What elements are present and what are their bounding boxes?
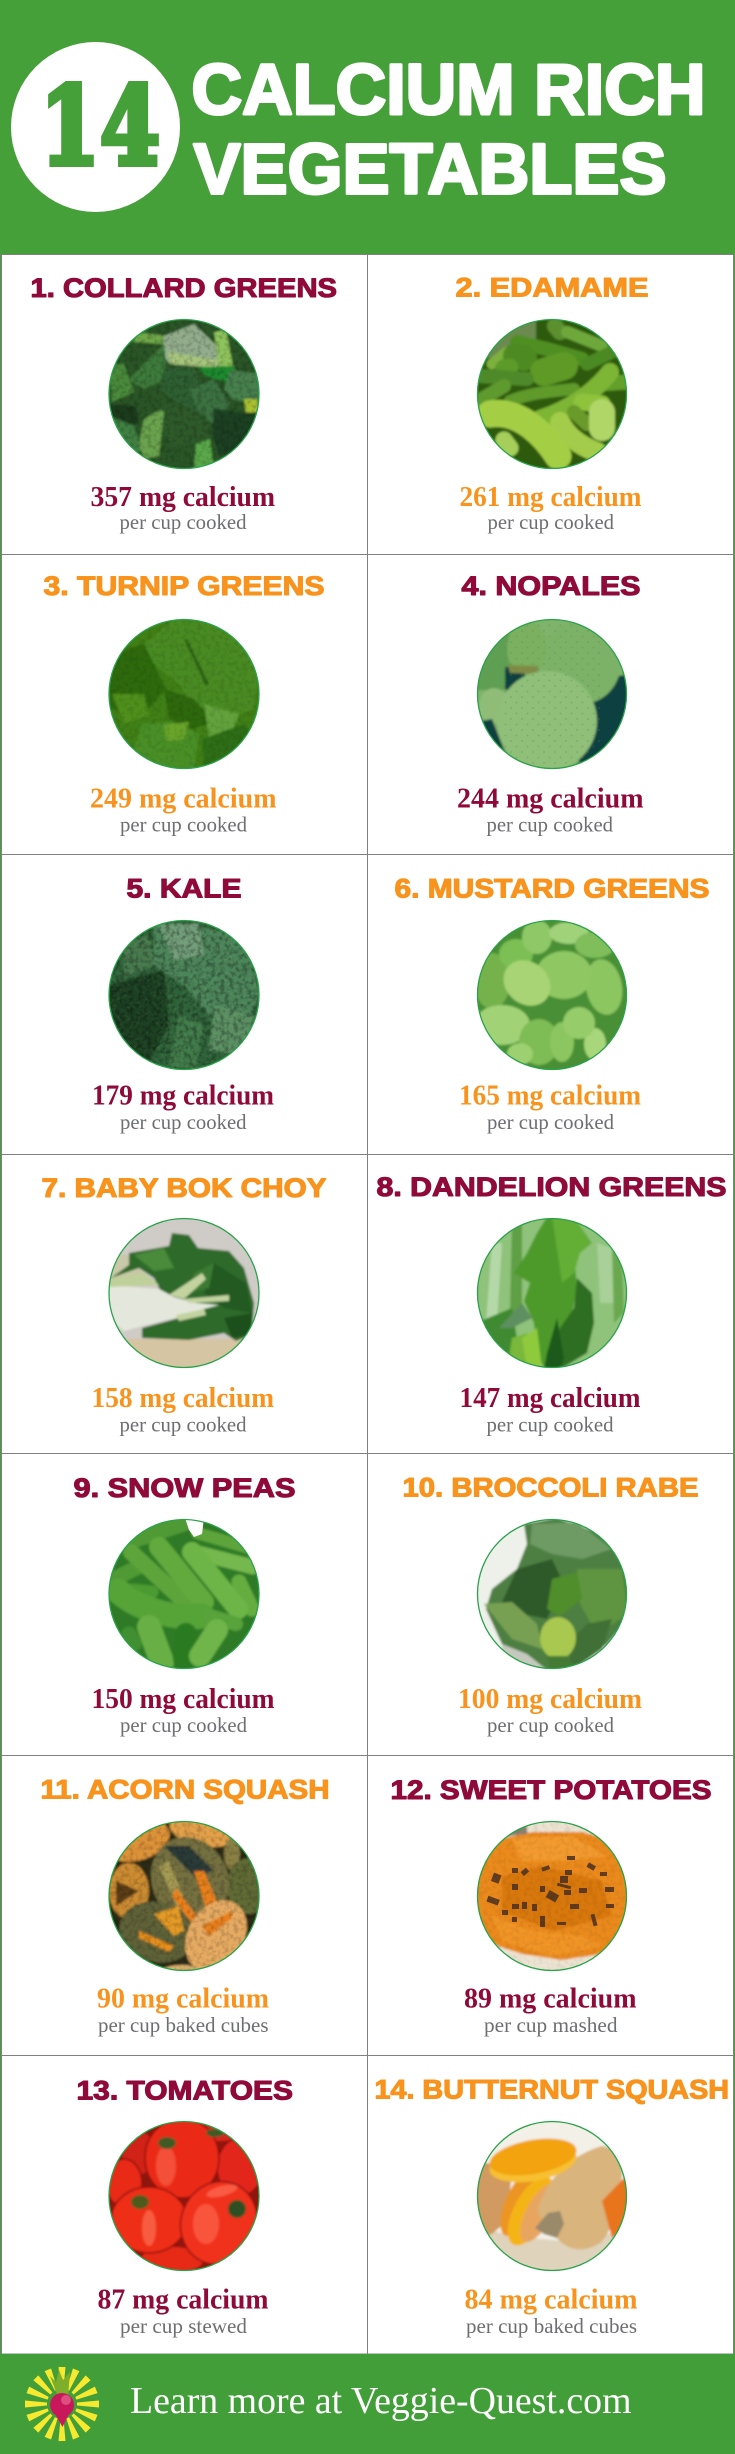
photo: snow peas [108,1518,260,1670]
serving note: per cup cooked [487,1110,614,1134]
badge: number 14 [11,42,180,212]
heading: 7. BABY BOK CHOY [42,1173,327,1203]
photo: baby bok choy [108,1217,260,1369]
amount: 357 mg calcium [90,482,275,513]
photo: broccoli rabe [476,1518,628,1670]
serving note: per cup cooked [120,1713,247,1737]
panel: 8 dandelion greens [368,1154,734,1454]
title: VEGETABLES [194,130,666,210]
serving note: per cup cooked [488,510,614,534]
panel: 2 edamame [368,254,734,554]
panel: 13 tomatoes [2,2056,368,2354]
photo: mustard greens [474,919,628,1071]
amount: 165 mg calcium [459,1080,641,1112]
amount: 244 mg calcium [457,784,644,814]
serving note: per cup mashed [484,2013,618,2037]
title [192,51,706,210]
panel: 14 butternut squash [368,2056,734,2354]
panel: 10 broccoli rabe [368,1454,734,1756]
footer banner [0,2354,735,2454]
photo: nopales [476,618,628,771]
serving note: per cup cooked [487,1713,614,1737]
panel: 1 collard greens [2,254,368,554]
badge: number 14: 14 [40,64,160,190]
panel: 12 sweet potatoes [368,1756,734,2056]
amount: 100 mg calcium [458,1684,642,1715]
serving note: per cup stewed [120,2314,247,2338]
photo: kale [108,919,260,1071]
heading: 12. SWEET POTATOES [390,1775,712,1805]
panel: 5 kale [2,854,368,1154]
amount: 147 mg calcium [460,1383,640,1414]
serving note: per cup cooked [486,812,613,836]
heading: 1. COLLARD GREENS [30,273,337,303]
serving note: per cup cooked [120,1412,247,1436]
amount: 261 mg calcium [460,482,642,513]
icon: radish logo [25,2367,99,2441]
heading: 10. BROCCOLI RABE [402,1472,698,1502]
panel: 4 nopales [368,554,734,854]
heading: 2. EDAMAME [456,272,648,302]
photo: acorn squash [108,1820,260,1972]
heading: 13. TOMATOES [76,2076,293,2106]
amount: 84 mg calcium [464,2284,638,2316]
panel: 7 baby bok choy [2,1154,368,1454]
amount: 90 mg calcium [97,1984,269,2014]
photo: edamame [476,318,628,470]
panel: 9 snow peas [2,1454,368,1756]
heading: 9. SNOW PEAS [74,1473,296,1503]
panel: 3 turnip greens [2,554,368,854]
serving note: per cup cooked [120,812,247,836]
heading: 14. BUTTERNUT SQUASH [374,2074,729,2104]
amount: 249 mg calcium [90,784,276,814]
photo: sweet potatoes [476,1820,628,1972]
amount: 89 mg calcium [464,1984,636,2014]
photo: butternut squash [476,2120,630,2272]
heading: 6. MUSTARD GREENS [394,874,710,904]
heading: 4. NOPALES [462,571,640,601]
serving note: per cup baked cubes [466,2314,637,2338]
serving note: per cup cooked [486,1412,614,1436]
heading: 5. KALE [126,874,242,904]
photo: tomatoes [108,2120,260,2272]
amount: 158 mg calcium [92,1383,274,1414]
photo: dandelion greens [476,1217,628,1369]
photo: turnip greens [108,618,260,770]
serving note: per cup cooked [120,1110,247,1134]
title: CALCIUM RICH [192,51,706,130]
serving note: per cup baked cubes [98,2013,268,2037]
heading: 11. ACORN SQUASH [40,1774,329,1804]
panel: 11 acorn squash [2,1756,368,2056]
website link text: Learn more at Veggie-Quest.com [130,2380,632,2422]
amount: 87 mg calcium [98,2284,268,2316]
header banner [0,0,735,254]
heading: 8. DANDELION GREENS [376,1172,726,1202]
serving note: per cup cooked [120,510,247,534]
amount: 150 mg calcium [92,1684,274,1715]
panel: 6 mustard greens [368,854,734,1154]
photo: collard greens [108,318,260,470]
heading: 3. TURNIP GREENS [44,571,324,601]
amount: 179 mg calcium [92,1080,274,1112]
